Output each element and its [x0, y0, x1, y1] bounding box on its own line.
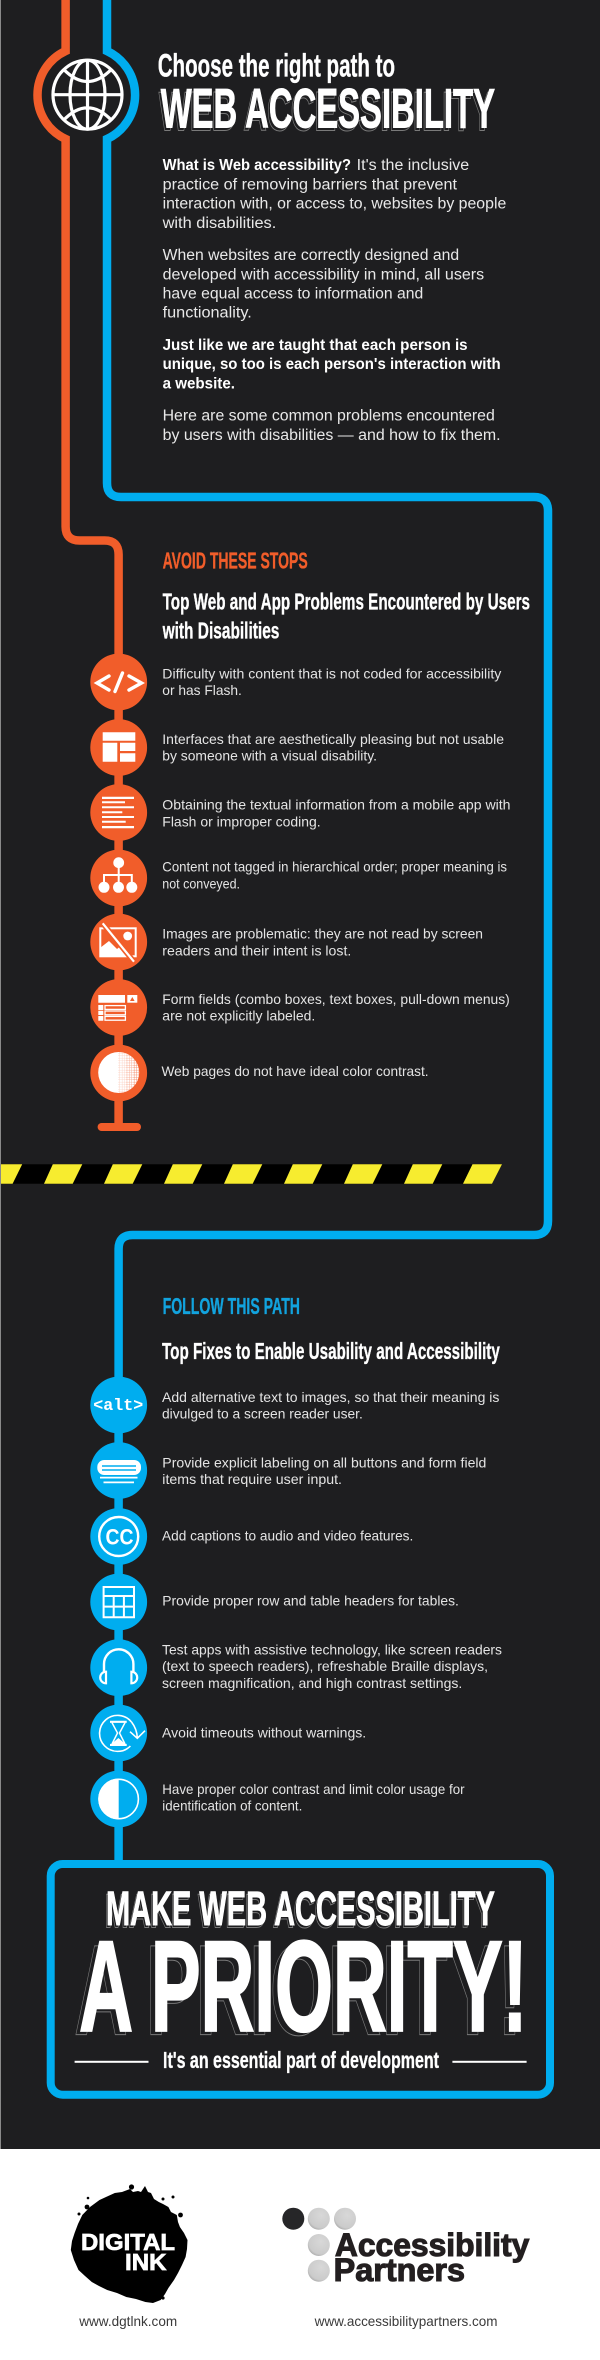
- title: Choose the right path to: [158, 48, 395, 84]
- panel: call to action: [51, 1864, 550, 2095]
- intro text: unique, so too is each person's interaction with: [163, 356, 501, 373]
- icon: table: [90, 1574, 147, 1630]
- fix 5 text: (text to speech readers), refreshable Braille displays,: [162, 1658, 488, 1674]
- blue path line: [107, 0, 548, 1862]
- hazard stripe: [1, 1164, 502, 1184]
- icon: text lines: [90, 784, 147, 841]
- icon: layout: [90, 719, 147, 776]
- fix 2 text: items that require user input.: [162, 1471, 342, 1487]
- fix 7 text: [162, 1781, 465, 1814]
- icon: crossed image: [90, 914, 147, 970]
- intro text: What is Web accessibility?: [163, 157, 351, 174]
- logo: Accessibility Partners: Partners: [334, 2252, 465, 2288]
- fix 5 text: screen magnification, and high contrast settings.: [162, 1675, 462, 1691]
- fix 1 text: Add alternative text to images, so that their meaning is: [162, 1389, 499, 1405]
- icon: globe: [53, 60, 122, 130]
- problem 2 text: Interfaces that are aesthetically pleasing but not usable: [162, 731, 504, 747]
- icon: form fields: [90, 979, 147, 1036]
- fix 6 text: Avoid timeouts without warnings.: [162, 1724, 366, 1740]
- intro text: by users with disabilities — and how to fix them.: [163, 427, 501, 444]
- fix 1 text: divulged to a screen reader user.: [162, 1406, 363, 1422]
- intro text: practice of removing barriers that prevent: [163, 176, 458, 193]
- problem 2 text: [162, 731, 504, 764]
- icon: low contrast: [90, 1045, 147, 1101]
- problem 5 text: [162, 926, 483, 958]
- intro text: Just like we are taught that each person is: [163, 337, 468, 354]
- heading: avoid these stops: AVOID THESE STOPS: [163, 548, 308, 574]
- icon: alt tag: [90, 1377, 147, 1433]
- logo: Accessibility Partners: Accessibility: [335, 2227, 530, 2263]
- orange path line: [38, 0, 119, 1127]
- intro text: interaction with, or access to, websites by people: [163, 196, 506, 213]
- intro text: functionality.: [163, 305, 252, 322]
- intro text: with disabilities.: [162, 215, 276, 232]
- heading: top problems: with Disabilities: [162, 617, 279, 643]
- url: Digital Ink: www.dgtlnk.com: [78, 2313, 177, 2329]
- intro text: a website.: [163, 375, 235, 392]
- problem 3 text: [162, 797, 511, 830]
- fix 1 text: [162, 1389, 499, 1422]
- logo: Digital Ink: [71, 2184, 188, 2303]
- problem 5 text: Images are problematic: they are not read by screen: [162, 926, 483, 942]
- problem 4 text: Content not tagged in hierarchical order; proper meaning is: [162, 859, 507, 875]
- problem 3 text: Flash or improper coding.: [162, 814, 321, 830]
- url: Accessibility Partners: www.accessibilitypartners.com: [314, 2313, 498, 2329]
- intro text: developed with accessibility in mind, all users: [163, 266, 484, 283]
- problem 6 text: Form fields (combo boxes, text boxes, pull-down menus): [162, 991, 510, 1007]
- problem 5 text: readers and their intent is lost.: [162, 942, 351, 958]
- problem 1 text: Difficulty with content that is not coded for accessibility: [162, 665, 501, 681]
- problem 4 text: [162, 859, 507, 892]
- problem 2 text: by someone with a visual disability.: [162, 748, 377, 764]
- problem 3 text: Obtaining the textual information from a mobile app with: [162, 797, 511, 813]
- intro text: [162, 157, 506, 444]
- fix 5 text: Test apps with assistive technology, like screen readers: [162, 1641, 502, 1657]
- icon: hierarchy: [90, 850, 147, 906]
- intro text: have equal access to information and: [163, 286, 423, 303]
- problem 4 text: not conveyed.: [162, 876, 240, 892]
- heading: top problems: [162, 588, 530, 643]
- icon: hourglass timeout: [90, 1705, 147, 1761]
- fix 2 text: Provide explicit labeling on all buttons and form field: [162, 1454, 486, 1470]
- icon: alt tag: <alt>: [93, 1397, 143, 1416]
- fix 2 text: [162, 1454, 486, 1487]
- logo: Digital Ink: DIGITAL: [81, 2229, 175, 2255]
- problem 7 text: Web pages do not have ideal color contrast.: [162, 1063, 429, 1079]
- problem 1 text: [162, 665, 501, 698]
- intro text: It's the inclusive: [357, 157, 469, 174]
- title: [158, 48, 495, 142]
- icon: closed captions: CC: [106, 1525, 134, 1550]
- tagline: It's an essential part of development: [163, 2047, 439, 2073]
- intro text: When websites are correctly designed and: [163, 247, 459, 264]
- orange line end stop: [98, 1123, 141, 1131]
- logo: Accessibility Partners: [282, 2208, 530, 2288]
- fix 7 text: Have proper color contrast and limit color usage for: [162, 1781, 465, 1797]
- fix 7 text: identification of content.: [162, 1798, 302, 1814]
- intro text: Here are some common problems encountered: [163, 408, 495, 425]
- problem 6 text: are not explicitly labeled.: [162, 1008, 315, 1024]
- fix 3 text: Add captions to audio and video features.: [162, 1527, 413, 1543]
- problem 6 text: [162, 991, 510, 1024]
- icon: code: [90, 654, 147, 710]
- fix 4 text: Provide proper row and table headers for tables.: [162, 1593, 459, 1609]
- fix 5 text: [162, 1641, 502, 1691]
- heading: follow this path: FOLLOW THIS PATH: [163, 1293, 300, 1319]
- icon: closed captions: [90, 1508, 147, 1565]
- icon: proper contrast: [90, 1771, 147, 1827]
- icon: labeled button: [90, 1442, 147, 1499]
- icon: headphones: [90, 1639, 147, 1696]
- problem 1 text: or has Flash.: [162, 682, 242, 698]
- logo: Digital Ink: INK: [125, 2249, 167, 2275]
